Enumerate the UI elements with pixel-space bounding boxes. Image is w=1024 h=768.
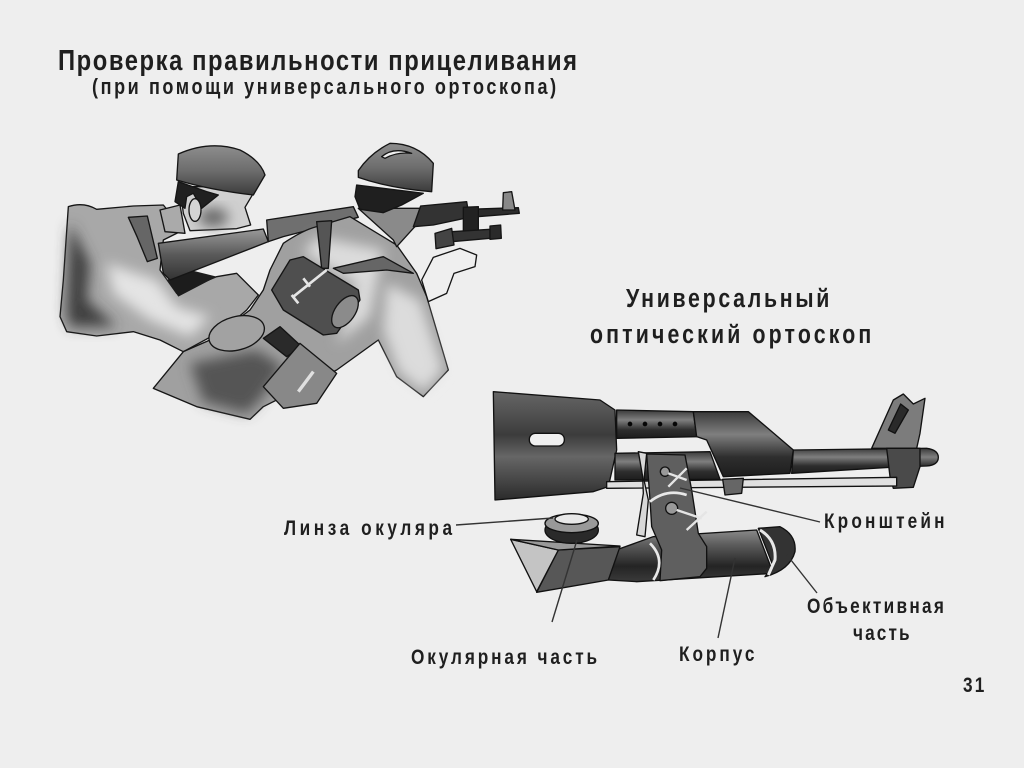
rear soldier arm highlight xyxy=(107,263,210,337)
rear soldier cheek shading xyxy=(198,208,228,227)
shoulder strap front xyxy=(333,257,413,273)
strap vertical xyxy=(317,221,332,268)
title: (при помощи универсального ортоскопа) xyxy=(92,75,556,99)
labels: часть xyxy=(853,623,910,645)
cap fold xyxy=(382,151,412,158)
eyepiece ring xyxy=(545,514,598,533)
heading: orthoscope: Универсальный xyxy=(626,284,829,314)
pouch buckle xyxy=(298,372,313,392)
pouch xyxy=(263,343,337,408)
bedroll buckle xyxy=(292,270,327,303)
title xyxy=(58,44,577,99)
prism housing xyxy=(537,547,620,592)
leader lines xyxy=(456,488,820,638)
rifle stock xyxy=(158,229,268,280)
labels xyxy=(284,511,945,669)
front soldier hair xyxy=(355,185,423,213)
lower pin xyxy=(666,502,707,530)
bedroll end xyxy=(326,291,364,332)
rear soldier back shading xyxy=(67,223,117,327)
canteen xyxy=(205,310,268,357)
labels: Объективная xyxy=(807,596,944,618)
bracket xyxy=(463,207,478,234)
bracket arm xyxy=(637,452,648,537)
rear soldier shoulder strap xyxy=(128,216,157,262)
page number: 31 xyxy=(963,675,985,697)
eyepiece base xyxy=(545,517,598,543)
cleaning rod xyxy=(607,477,897,488)
bedroll xyxy=(272,257,360,335)
rear soldier cap xyxy=(177,146,265,195)
diagram: rifle with orthoscope xyxy=(493,392,938,592)
hand xyxy=(422,248,477,302)
bracket loop xyxy=(650,493,687,580)
front soldier lower shading xyxy=(190,350,283,413)
upper tube xyxy=(617,410,697,438)
objective band xyxy=(760,530,775,575)
rear soldier ear xyxy=(189,199,201,221)
labels: Корпус xyxy=(679,644,755,666)
front soldier arm highlight xyxy=(383,283,443,392)
barrel xyxy=(792,448,938,473)
objective ring xyxy=(758,527,795,577)
prism light face xyxy=(511,539,558,592)
lower tube xyxy=(615,452,720,480)
front rifle tube xyxy=(413,202,469,227)
labels: Линза окуляра xyxy=(284,518,452,540)
front sight slot xyxy=(888,404,908,433)
front soldier cap xyxy=(358,143,433,192)
rifle receiver xyxy=(267,207,358,242)
orthoscope eyepiece xyxy=(435,228,454,249)
rear soldier face xyxy=(180,187,253,231)
front sight xyxy=(872,394,925,448)
orthoscope tube xyxy=(452,229,490,242)
front rifle barrel xyxy=(468,208,519,217)
handguard slot xyxy=(529,433,564,446)
rear soldier body xyxy=(60,205,258,352)
belt xyxy=(263,327,302,357)
bracket plate xyxy=(647,454,707,581)
front soldier body xyxy=(153,217,448,419)
gas block xyxy=(693,412,793,477)
heading: orthoscope: оптический ортоскоп xyxy=(590,320,871,350)
orthoscope objective xyxy=(490,225,501,239)
front sight xyxy=(503,192,515,210)
rear soldier hair xyxy=(175,182,218,208)
front soldier back highlight xyxy=(303,237,383,343)
front soldier head xyxy=(358,208,422,247)
illustration: two soldiers checking aim xyxy=(60,143,519,419)
upper pin xyxy=(660,467,687,487)
labels: Окулярная часть xyxy=(411,647,597,669)
orthoscope body xyxy=(607,530,773,582)
rod clip xyxy=(723,478,743,495)
sight block xyxy=(887,448,920,488)
rear soldier arm shadow xyxy=(167,270,217,297)
prism top xyxy=(511,539,620,550)
handguard xyxy=(493,392,617,500)
title: Проверка правильности прицеливания xyxy=(58,44,577,77)
heading: orthoscope xyxy=(590,284,871,350)
labels: Кронштейн xyxy=(824,511,945,533)
rear soldier neck xyxy=(160,205,185,233)
gas tube holes xyxy=(628,422,677,426)
eyepiece lens xyxy=(555,514,588,524)
